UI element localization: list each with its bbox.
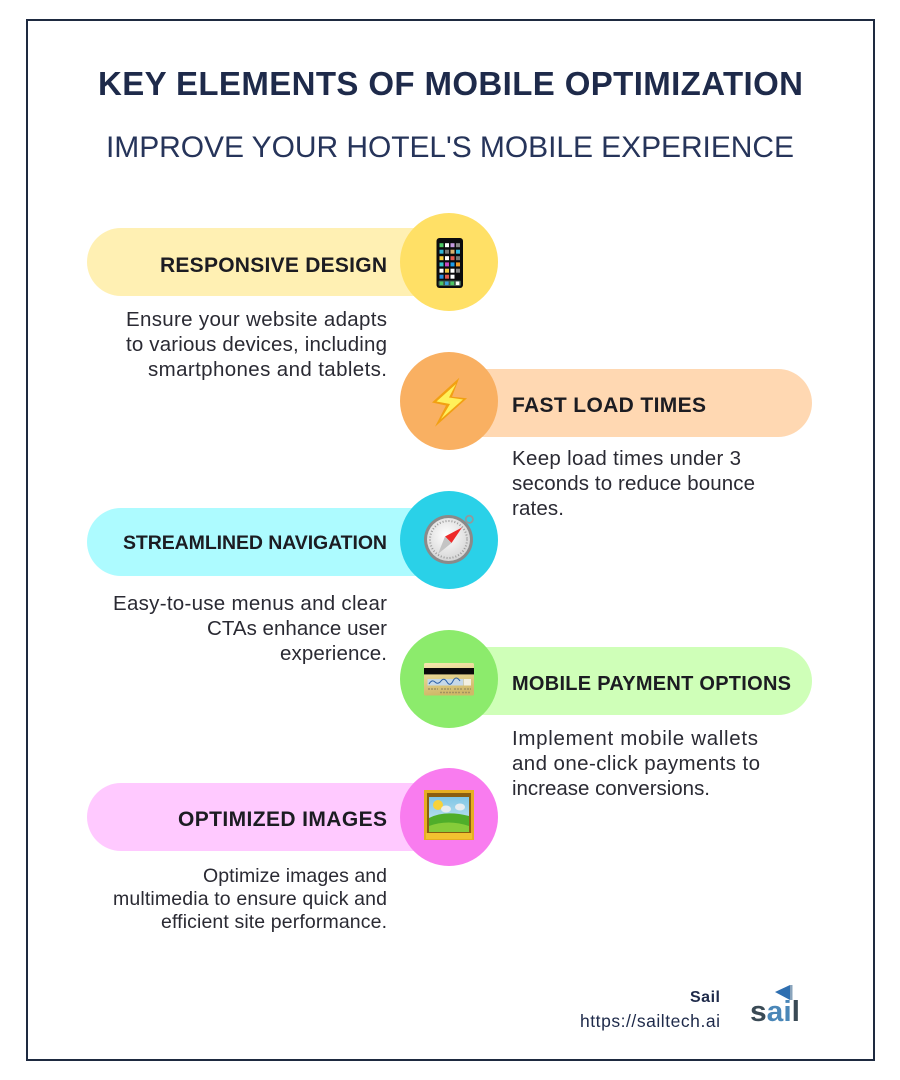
circle: responsive design [400, 213, 498, 311]
text: mobile payment options description: and one-click payments to [512, 752, 760, 775]
text: mobile payment options description: increase conversions. [512, 777, 710, 800]
subtitle: IMPROVE YOUR HOTEL'S MOBILE EXPERIENCE [106, 131, 794, 164]
heading: responsive design: RESPONSIVE DESIGN [160, 254, 387, 277]
pill: optimized images [87, 783, 449, 851]
panel: optimized images [87, 768, 498, 933]
text: responsive design description [126, 308, 387, 381]
brand name: Sail [690, 989, 720, 1006]
heading: optimized images: OPTIMIZED IMAGES [178, 808, 387, 831]
icon: sail logo: sail [750, 996, 800, 1028]
icon: framed picture [424, 790, 474, 840]
text: fast load times description: seconds to reduce bounce [512, 472, 755, 495]
title: KEY ELEMENTS OF MOBILE OPTIMIZATION [98, 65, 803, 102]
text: responsive design description: smartphones and tablets. [148, 358, 387, 381]
icon: compass [424, 515, 473, 564]
text: responsive design description: Ensure your website adapts [126, 308, 387, 331]
text: mobile payment options description: Implement mobile wallets [512, 727, 758, 750]
text: optimized images description [113, 865, 387, 933]
text: optimized images description: efficient site performance. [161, 911, 387, 933]
text: streamlined navigation description: Easy-to-use menus and clear [113, 592, 387, 615]
icon: lightning bolt [432, 378, 467, 427]
text: fast load times description: rates. [512, 497, 564, 520]
heading: streamlined navigation: STREAMLINED NAVIGATION [123, 532, 387, 554]
circle: mobile payment options [400, 630, 498, 728]
footer [580, 985, 800, 1031]
circle: optimized images [400, 768, 498, 866]
text: optimized images description: multimedia to ensure quick and [113, 888, 387, 910]
text: optimized images description: Optimize images and [203, 865, 387, 887]
pill: streamlined navigation [87, 508, 449, 576]
panel: responsive design [87, 213, 498, 381]
pill: responsive design [87, 228, 449, 296]
pill: mobile payment options [449, 647, 812, 715]
heading: fast load times: FAST LOAD TIMES [512, 394, 706, 417]
icon: smartphone [436, 238, 463, 288]
pill: fast load times [449, 369, 812, 437]
text: fast load times description: Keep load times under 3 [512, 447, 741, 470]
text: mobile payment options description [512, 727, 760, 800]
circle: streamlined navigation [400, 491, 498, 589]
icon: credit card [424, 663, 474, 696]
text: streamlined navigation description [113, 592, 387, 665]
text: responsive design description: to various devices, including [126, 333, 387, 356]
panel: streamlined navigation [87, 491, 498, 665]
panel: fast load times [400, 352, 812, 520]
text: fast load times description [512, 447, 755, 520]
heading: mobile payment options: MOBILE PAYMENT OPTIONS [512, 673, 791, 695]
panel: mobile payment options [400, 630, 812, 800]
text: streamlined navigation description: CTAs enhance user [207, 617, 387, 640]
text: streamlined navigation description: experience. [280, 642, 387, 665]
circle: fast load times [400, 352, 498, 450]
website url: https://sailtech.ai [580, 1011, 720, 1031]
